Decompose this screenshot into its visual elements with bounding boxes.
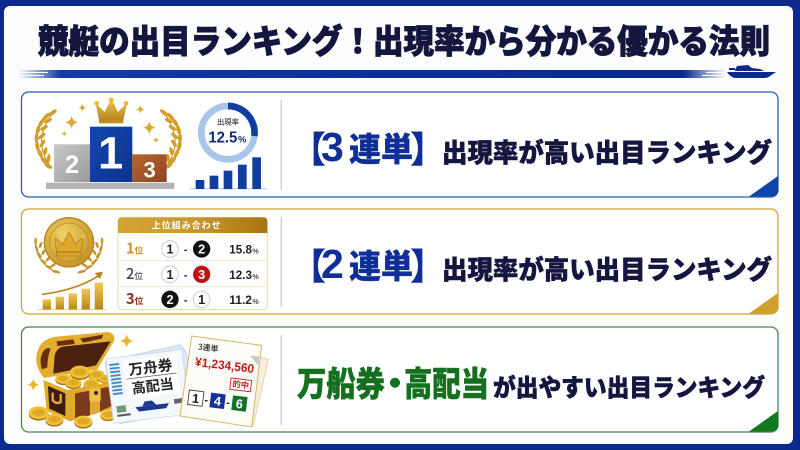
heading text: 出現率が高い出目ランキング xyxy=(442,133,772,170)
row 1 xyxy=(126,238,259,259)
podium second place: 2 xyxy=(65,151,79,179)
heading: 3連単: 【 xyxy=(290,121,326,173)
table header: 上位組み合わせ xyxy=(152,219,222,232)
row 2: 2位 xyxy=(126,263,143,284)
row 3 xyxy=(126,288,259,309)
heading: 万船券・高配当: ・ xyxy=(378,357,412,406)
heading: 2連単: 【 xyxy=(290,238,326,290)
donut chart: 12.5%: 12.5 xyxy=(208,130,238,147)
gold coin pile xyxy=(55,366,111,390)
icon: speed boat xyxy=(727,65,776,78)
podium base xyxy=(46,183,174,189)
ticket: 3連単 的中: 6 xyxy=(235,397,244,412)
row 3: 2 xyxy=(166,293,174,307)
ticket: 3連単 的中: 4 xyxy=(213,394,222,409)
row 1: % xyxy=(252,247,259,256)
panel frame xyxy=(22,327,778,432)
heading: 万船券・高配当 xyxy=(297,357,489,406)
heading: 2連単: 連単 xyxy=(349,240,413,288)
podium illustration xyxy=(34,98,182,189)
heading: 2連単 xyxy=(290,238,446,290)
donut chart: 12.5% xyxy=(201,106,255,159)
rising gold bars xyxy=(38,283,107,310)
crown xyxy=(94,98,128,123)
ranking table xyxy=(118,217,267,310)
donut chart: 12.5%: % xyxy=(238,135,247,145)
heading: 2連単: 】 xyxy=(410,238,446,290)
row 2: 12.3 xyxy=(229,269,252,282)
laurel wreath xyxy=(34,108,182,170)
row 2: 1 xyxy=(166,268,174,282)
row 2: 3 xyxy=(198,268,205,282)
ticket: 3連単 的中: ¥1,234,560 xyxy=(194,355,255,376)
ticket: 万舟券 高配当 xyxy=(105,345,197,424)
sparkles xyxy=(61,104,159,143)
panel frame xyxy=(22,209,778,314)
ticket: 3連単 的中 xyxy=(180,336,268,427)
row 3: 1 xyxy=(198,293,205,307)
panel: 万船券・高配当 xyxy=(22,327,778,432)
panel: 2連単 xyxy=(22,209,778,314)
podium third place: 3 xyxy=(144,157,156,182)
table header xyxy=(118,217,267,233)
row 3: % xyxy=(252,297,259,306)
ticket: 3連単 的中: 3連単 xyxy=(197,341,219,355)
row 3: 11.2 xyxy=(229,294,253,307)
divider xyxy=(280,217,282,307)
growth arrow xyxy=(42,272,103,294)
bar chart xyxy=(190,157,267,189)
heading: 3連単: 3 xyxy=(321,124,344,170)
heading: 2連単: 2 xyxy=(321,241,344,287)
chest body xyxy=(43,380,115,421)
row 3: 3位 xyxy=(126,288,144,309)
row 1: 15.8 xyxy=(229,244,252,257)
heading: 3連単: 】 xyxy=(410,121,446,173)
sparkles xyxy=(27,334,134,391)
ticket: 3連単 的中: 的中 xyxy=(232,378,250,392)
row 1: 1位 xyxy=(126,238,144,259)
row 1: - xyxy=(184,244,188,256)
row 2 xyxy=(126,263,259,284)
panel: 3連単 xyxy=(22,92,778,197)
heading: 3連単 xyxy=(290,121,446,173)
row 2: % xyxy=(252,272,259,281)
speed line under title xyxy=(18,70,728,78)
gold medal xyxy=(44,217,94,268)
divider xyxy=(280,100,282,190)
heading text: 出現率が高い出目ランキング xyxy=(442,250,772,287)
podium third place xyxy=(132,154,167,182)
ticket: 3連単 的中: - xyxy=(204,394,209,407)
medal illustration xyxy=(34,217,107,310)
podium first place: 1 xyxy=(98,127,123,178)
ticket: 3連単 的中: 1 xyxy=(191,391,200,406)
donut chart: 12.5%: 出現率 xyxy=(217,117,239,128)
podium second place xyxy=(54,144,90,182)
chest lid xyxy=(36,332,114,378)
divider xyxy=(280,335,282,425)
ticket: 3連単 的中: - xyxy=(226,397,231,409)
row 1: 2 xyxy=(198,243,205,257)
row 1: 1 xyxy=(166,243,174,257)
podium first place xyxy=(90,127,132,182)
laurels xyxy=(34,238,103,274)
loose coins xyxy=(29,406,116,429)
row 2: - xyxy=(184,269,188,281)
heading: 万船券・高配当: 万船券 xyxy=(297,357,385,406)
heading text: が出やすい出目ランキング xyxy=(493,368,765,403)
ticket: 万舟券 高配当: 万舟券 xyxy=(127,354,174,380)
ticket: 万舟券 高配当: 高配当 xyxy=(131,374,175,398)
row 3: - xyxy=(184,294,188,306)
heading: 万船券・高配当: 高配当 xyxy=(404,357,489,406)
panel frame xyxy=(22,92,778,197)
treasure chest illustration xyxy=(27,332,134,429)
heading: 3連単: 連単 xyxy=(349,123,413,171)
